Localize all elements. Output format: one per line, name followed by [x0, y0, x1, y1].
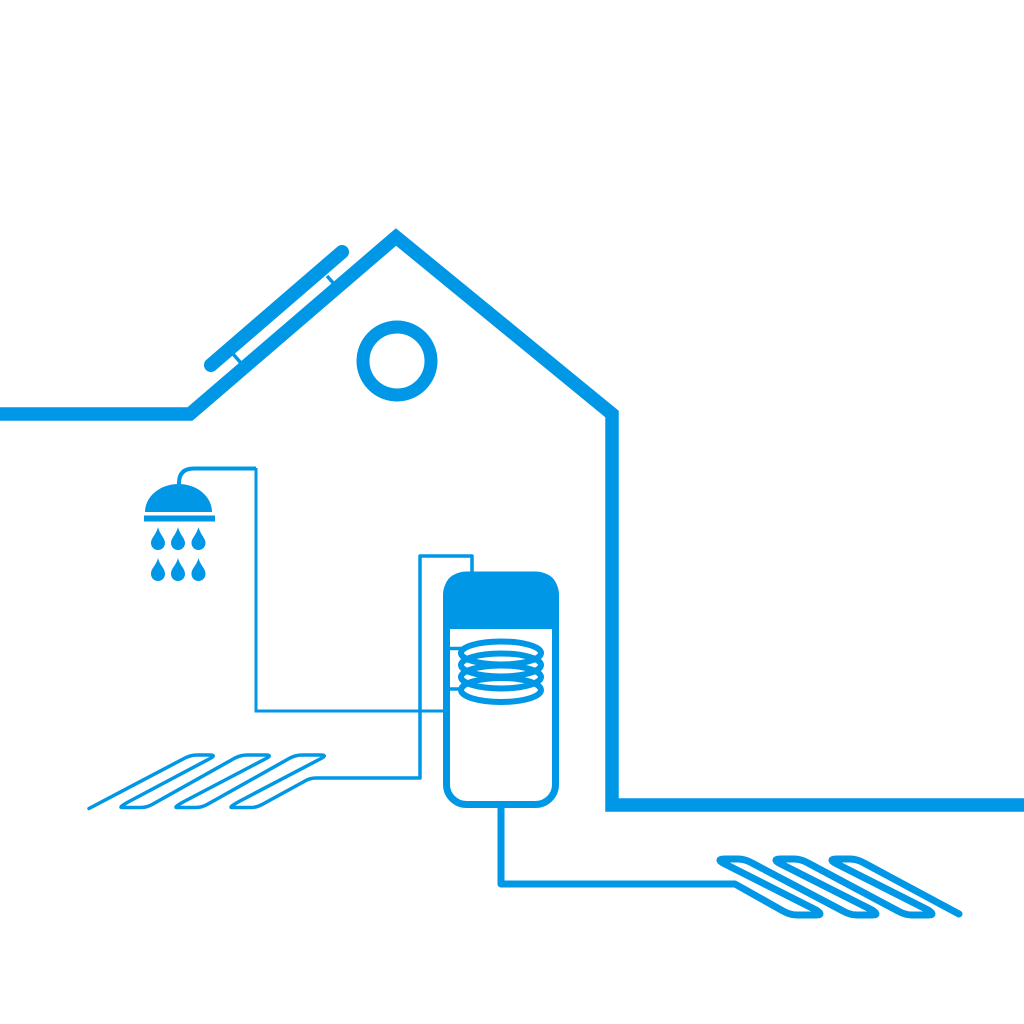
pipe: shower supply to tank — [256, 468, 444, 711]
pipe and ground collector coil on right — [501, 807, 959, 915]
solar panel on roof — [211, 252, 342, 365]
icon: shower head with water drops — [144, 468, 256, 581]
round attic window — [363, 327, 431, 395]
house outline and ground line — [0, 237, 1024, 805]
heat exchanger coil — [449, 642, 541, 702]
water storage tank — [444, 572, 558, 804]
pipe and underfloor heating coil on left — [89, 556, 472, 808]
